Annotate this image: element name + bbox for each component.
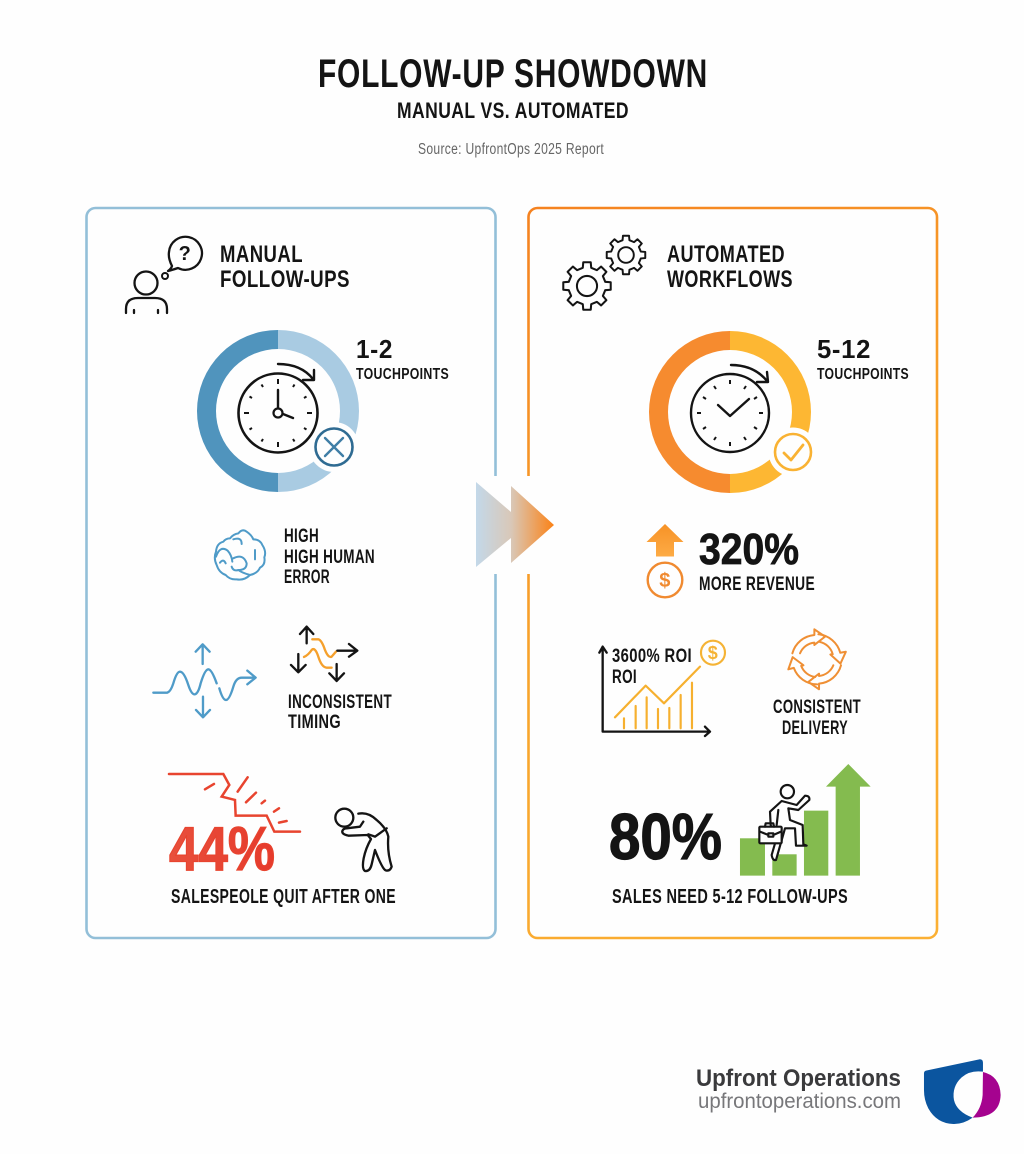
text: inconsistent timing: TIMING: [288, 712, 341, 733]
icon: check badge: [775, 434, 811, 470]
text: inconsistent timing: [288, 692, 392, 733]
icon: revenue arrow and coin: [646, 524, 684, 597]
stat: 320% more revenue: 320%: [699, 525, 799, 574]
text: consistent delivery: CONSISTENT: [773, 697, 861, 718]
icon: clock: [238, 364, 318, 452]
caption: salespeople quit: SALESPEOLE QUIT AFTER ONE: [171, 886, 396, 908]
icon: cycle arrows: [786, 629, 848, 691]
text: high human error: HIGH: [284, 526, 319, 547]
heading: manual follow-ups: [220, 241, 350, 293]
stat: 5-12 touchpoints: 5-12: [817, 334, 871, 364]
panel: automated workflows: [528, 208, 937, 938]
icon: upfront operations logo: [924, 1059, 1001, 1124]
subtitle: MANUAL VS. AUTOMATED: [397, 98, 629, 123]
panel: manual follow-ups: [86, 208, 496, 938]
stat: 1-2 touchpoints: 1-2: [356, 334, 393, 364]
stat: 320% more revenue: [699, 525, 815, 595]
donut chart: manual: [197, 330, 359, 492]
icon: falling cliff line: [169, 774, 300, 832]
website: upfrontoperations.com: [698, 1090, 901, 1113]
icon: clock with check hands: [691, 365, 769, 452]
heading: automated workflows: AUTOMATED: [667, 241, 785, 268]
stat: 1-2 touchpoints: [356, 334, 449, 383]
stat: 44%: 44%: [169, 815, 275, 884]
stat: 5-12 touchpoints: TOUCHPOINTS: [817, 366, 909, 383]
caption: sales need follow-ups: SALES NEED 5-12 FOLLOW-UPS: [612, 886, 848, 908]
heading: automated workflows: [667, 241, 793, 293]
icon: growth bars with climbing person: [740, 764, 871, 876]
text: inconsistent timing: INCONSISTENT: [288, 692, 392, 713]
stat: 1-2 touchpoints: TOUCHPOINTS: [356, 366, 449, 383]
heading: manual follow-ups: FOLLOW-UPS: [220, 266, 350, 293]
donut chart: automated: [649, 331, 818, 493]
title: FOLLOW-UP SHOWDOWN: [318, 52, 708, 96]
logo block: [696, 1059, 1001, 1124]
text: high human error: ERROR: [284, 567, 330, 588]
stat: 5-12 touchpoints: [817, 334, 909, 383]
icon: person with question bubble: [126, 237, 202, 313]
icon: gears: [563, 236, 645, 310]
text: consistent delivery: DELIVERY: [782, 718, 848, 739]
chart: roi line and bars: $: [708, 643, 718, 663]
stat: 320% more revenue: MORE REVENUE: [699, 573, 815, 595]
text: consistent delivery: [773, 697, 861, 739]
icon: revenue arrow and coin: $: [659, 570, 671, 592]
stat: 80%: 80%: [609, 800, 722, 873]
chart: roi line and bars: [599, 641, 725, 736]
heading: manual follow-ups: MANUAL: [220, 241, 303, 268]
source line: Source: UpfrontOps 2025 Report: [418, 141, 604, 158]
icon: person with question bubble: ?: [179, 243, 191, 265]
text: high human error: [284, 526, 375, 588]
arrow: manual to automated: [470, 476, 560, 574]
icon: timing arrows: [291, 627, 357, 681]
chart: roi line and bars: 3600% ROI: [612, 646, 692, 667]
heading: automated workflows: WORKFLOWS: [667, 266, 793, 293]
brand name: Upfront Operations: [696, 1065, 901, 1092]
icon: erratic wave: [153, 644, 256, 717]
header: [318, 52, 708, 158]
icon: x badge: [316, 428, 352, 466]
chart: roi line and bars: ROI: [612, 667, 637, 688]
icon: crumpled brain: [215, 530, 265, 580]
text: high human error: HIGH HUMAN: [284, 547, 375, 568]
icon: exhausted person: [335, 809, 392, 871]
